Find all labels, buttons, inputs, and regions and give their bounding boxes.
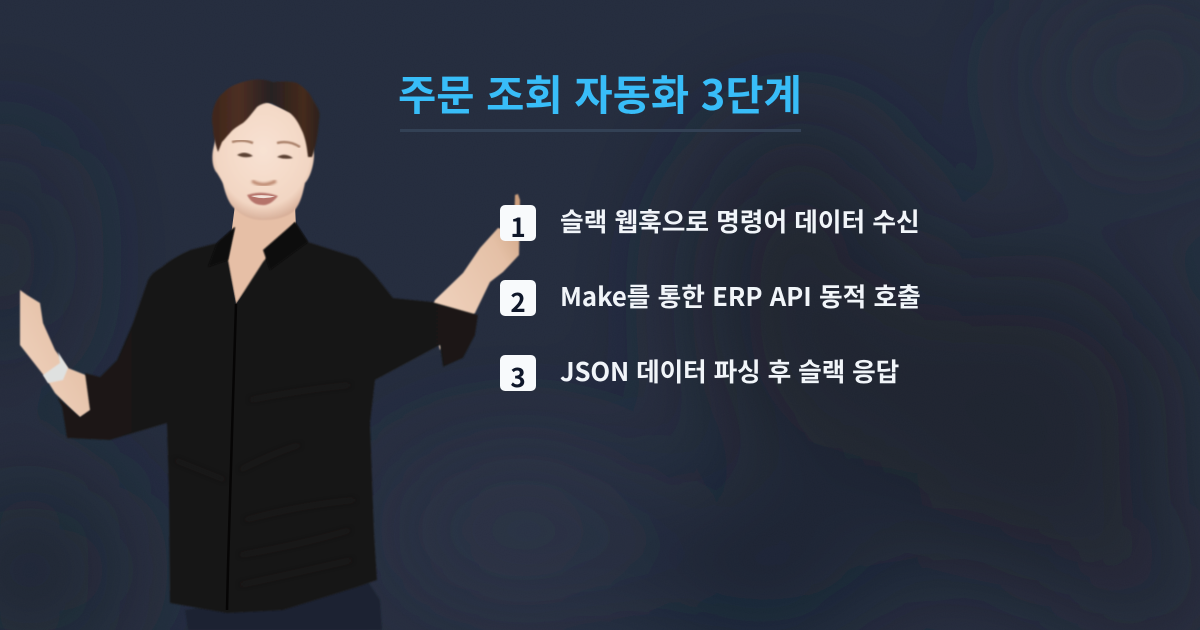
neck and chest: [226, 205, 296, 304]
step 2: 2: [510, 283, 526, 320]
head and face: [212, 100, 314, 220]
shirt placket: [227, 304, 236, 610]
eyes: [237, 153, 293, 159]
step 3: JSON 데이터 파싱 후 슬랙 응답: [560, 352, 899, 389]
nose: [252, 181, 276, 184]
step 1: 1: [510, 208, 526, 245]
step 2: Make를 통한 ERP API 동적 호출: [560, 277, 921, 314]
step 3: 3: [510, 358, 526, 395]
shirt folds: [175, 385, 355, 585]
hair: [212, 79, 320, 157]
mouth: [247, 193, 278, 205]
wristwatch: [43, 352, 68, 383]
right arm and hand: [430, 194, 520, 350]
jeans: [185, 580, 382, 630]
black shirt: [57, 222, 478, 613]
left arm and hand: [20, 290, 92, 418]
shirt collar: [208, 222, 308, 270]
title: 주문 조회 자동화 3단계: [398, 62, 802, 122]
title underline: [400, 129, 801, 132]
eyebrows: [232, 141, 300, 147]
step 1: 슬랙 웹훅으로 명령어 데이터 수신: [560, 202, 920, 239]
